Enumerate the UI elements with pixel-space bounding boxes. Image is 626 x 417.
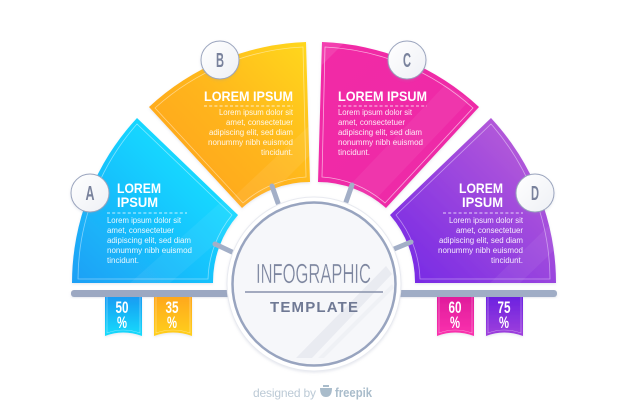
tab: 50%: 50 [116,298,128,317]
badge: B [201,41,239,79]
text block: B: adipiscing elit, sed diam [209,128,293,137]
title: INFOGRAPHIC: INFOGRAPHIC [256,258,371,289]
text block: C: Lorem ipsum dolor sit [338,108,413,117]
text block: D: nonummy nibh euismod [438,246,523,255]
credit: designed by freepik [253,385,372,400]
text block: D [438,216,524,265]
tab: 75% [486,297,523,336]
text block: C: tincidunt. [338,148,370,157]
tab: 35% [154,297,192,336]
text block: A: amet, consectetuer [107,226,174,235]
tab: 75%: % [499,313,509,332]
badge: C: C [403,50,411,72]
badge: D [516,174,554,212]
tab: 35%: % [167,313,177,332]
badge: A [71,174,109,212]
tab: 35%: 35 [166,298,178,317]
text block: D: amet, consectetuer [456,226,523,235]
text block: A: Lorem ipsum dolor sit [107,216,182,225]
heading: B: LOREM IPSUM [204,88,293,104]
text block: D: Lorem ipsum dolor sit [449,216,524,225]
panel: B [149,42,315,215]
text block: C: adipiscing elit, sed diam [338,128,422,137]
credit: designed by freepik: freepik [335,386,372,400]
panel: A [72,118,238,285]
text block: B: Lorem ipsum dolor sit [219,108,294,117]
badge: A: A [86,183,94,205]
badge: C [388,41,426,79]
text block: C [338,108,423,157]
tab: 60%: 60 [448,298,462,317]
tab: 60%: % [450,313,460,332]
bar: right shelf [396,290,557,297]
text block: B: nonummy nibh euismod [208,138,293,147]
tab: 60% [437,297,474,336]
badge: D: D [531,183,539,205]
heading: C: LOREM IPSUM [338,88,427,104]
text block: A: tincidunt. [107,256,139,265]
text block: A [107,216,192,265]
panel: C [318,42,479,208]
panel: A: IPSUM [117,194,158,210]
text block: D: tincidunt. [491,256,523,265]
text block: B: tincidunt. [261,148,293,157]
panel: D: IPSUM [462,194,503,210]
subtitle: TEMPLATE: TEMPLATE [270,299,358,316]
tab: 75%: 75 [498,298,510,317]
text block: C: amet, consectetuer [338,118,405,127]
text block: C: nonummy nibh euismod [338,138,423,147]
connector spokes [215,185,411,252]
icon: freepik logo [320,385,332,397]
text block: B: amet, consectetuer [226,118,293,127]
badge: B: B [216,50,224,72]
tab: 50%: % [117,313,127,332]
heading: A: LOREM [117,180,161,196]
text block: B [208,108,294,157]
text block: D: adipiscing elit, sed diam [439,236,523,245]
credit: designed by freepik: designed by [253,386,316,400]
panel: D [390,118,570,283]
text block: A: adipiscing elit, sed diam [107,236,191,245]
bar: left shelf [71,290,236,297]
tab: 50% [105,297,142,336]
heading: D: LOREM [459,180,503,196]
central circle [227,197,401,371]
text block: A: nonummy nibh euismod [107,246,192,255]
